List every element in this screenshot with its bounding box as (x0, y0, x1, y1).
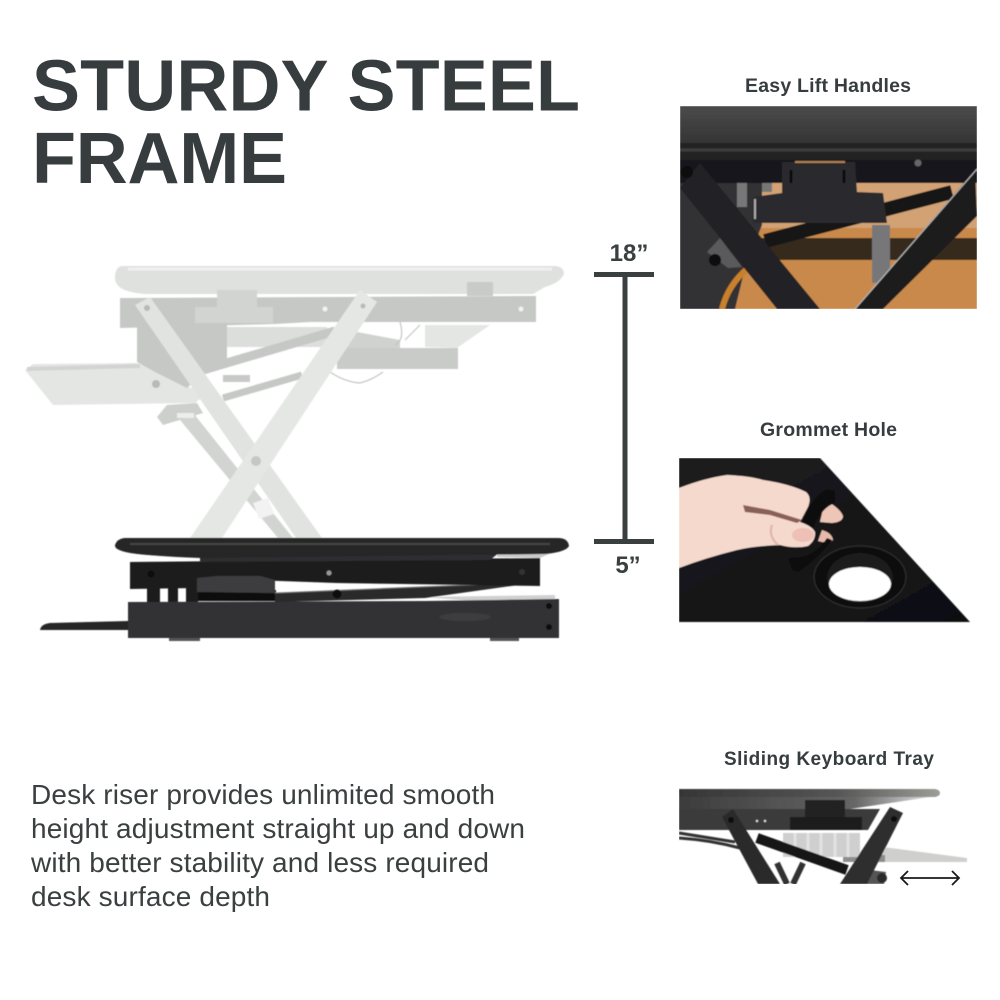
grommet hole (829, 567, 891, 601)
title: STURDY STEEL (32, 46, 580, 126)
keyboard tray (25, 363, 205, 405)
arrow: slide direction (901, 871, 959, 885)
heading: grommet hole: Grommet Hole (760, 419, 897, 441)
finger crease (743, 505, 802, 523)
desk board (679, 458, 970, 622)
slat stripes (795, 833, 848, 857)
left beam (680, 163, 820, 309)
handle (195, 290, 273, 323)
desktop surface (115, 266, 564, 294)
underside of top (200, 552, 500, 562)
wires (330, 322, 420, 383)
dark floor band (760, 238, 977, 260)
plate underside (679, 797, 930, 809)
illustration: lowered desk riser (black) (40, 538, 569, 641)
top rail (120, 296, 536, 328)
label: 5 inches: 5” (615, 552, 641, 579)
height dimension marker (594, 240, 654, 579)
knob (877, 873, 887, 883)
slots (737, 183, 772, 207)
description text: desk surface depth (31, 881, 270, 912)
pale wood backdrop (760, 183, 977, 228)
description text: height adjustment straight up and down (31, 813, 525, 844)
grey post (872, 225, 890, 283)
grommet cap ring (788, 489, 835, 572)
left dark panel (680, 183, 762, 309)
top plate (679, 789, 940, 797)
ghost sliding tray (882, 846, 968, 862)
heading: sliding keyboard tray: Sliding Keyboard Tray (724, 749, 934, 770)
scissor beam B (190, 290, 377, 538)
ghost bolts (144, 304, 524, 388)
knob bracket (866, 870, 886, 884)
tray dark section (843, 855, 885, 862)
surface highlight (130, 543, 550, 545)
description text: Desk riser provides unlimited smooth (31, 779, 495, 810)
handle lever (157, 403, 203, 425)
right beam (855, 170, 977, 309)
photo: grommet hole (679, 458, 970, 622)
rail (130, 558, 540, 589)
handle (753, 162, 887, 223)
bolts (728, 816, 897, 823)
lifting arm (275, 582, 540, 602)
pivot bolt (251, 456, 261, 466)
hinge (805, 800, 845, 818)
small block (223, 375, 250, 382)
label: 18 inches: 18” (610, 240, 648, 267)
pull bar (40, 621, 128, 630)
handle (197, 576, 275, 593)
bracket (707, 238, 742, 268)
rail (680, 160, 977, 183)
lower bracket (337, 348, 458, 369)
slanted underside (425, 325, 490, 348)
small V struts (777, 863, 803, 884)
underside block (467, 282, 493, 296)
title (32, 46, 580, 199)
handle (790, 817, 862, 830)
mechanism block (137, 325, 227, 388)
orange cable (722, 268, 748, 309)
back supports (147, 586, 198, 602)
light wedge (425, 595, 555, 601)
wires (679, 833, 740, 848)
thumbnail (792, 528, 814, 542)
grommet wall (827, 553, 893, 603)
photo: easy lift handles (680, 106, 977, 309)
right beam (840, 807, 903, 884)
description text (30, 779, 525, 912)
base mark (439, 613, 491, 621)
cross rods (203, 331, 335, 398)
tube (765, 192, 952, 241)
gap shade (227, 327, 327, 347)
scissor beam A (135, 297, 322, 538)
description text: with better stability and less required (30, 847, 489, 878)
plate edge (680, 143, 977, 161)
photo: sliding keyboard tray (679, 789, 967, 884)
base tray (128, 599, 559, 638)
white rear clip (253, 498, 274, 519)
rail (679, 809, 880, 830)
grommet base (814, 546, 906, 608)
left beam (722, 809, 780, 884)
thumb crease (771, 525, 778, 545)
rear scissor beam (180, 414, 293, 538)
illustration: raised desk riser (ghosted) (25, 266, 564, 538)
bolts (148, 569, 552, 630)
bolts (681, 160, 922, 266)
heading: easy lift handles: Easy Lift Handles (745, 75, 911, 97)
rod (757, 838, 847, 870)
dark gap under handle (198, 590, 276, 601)
grey underside wedge (340, 332, 400, 348)
top plate (680, 106, 977, 144)
title: FRAME (32, 119, 287, 199)
feet (169, 637, 519, 641)
translucent background slats (783, 833, 860, 857)
far fingers (820, 500, 843, 523)
desktop surface (115, 538, 569, 558)
hand (679, 475, 815, 568)
